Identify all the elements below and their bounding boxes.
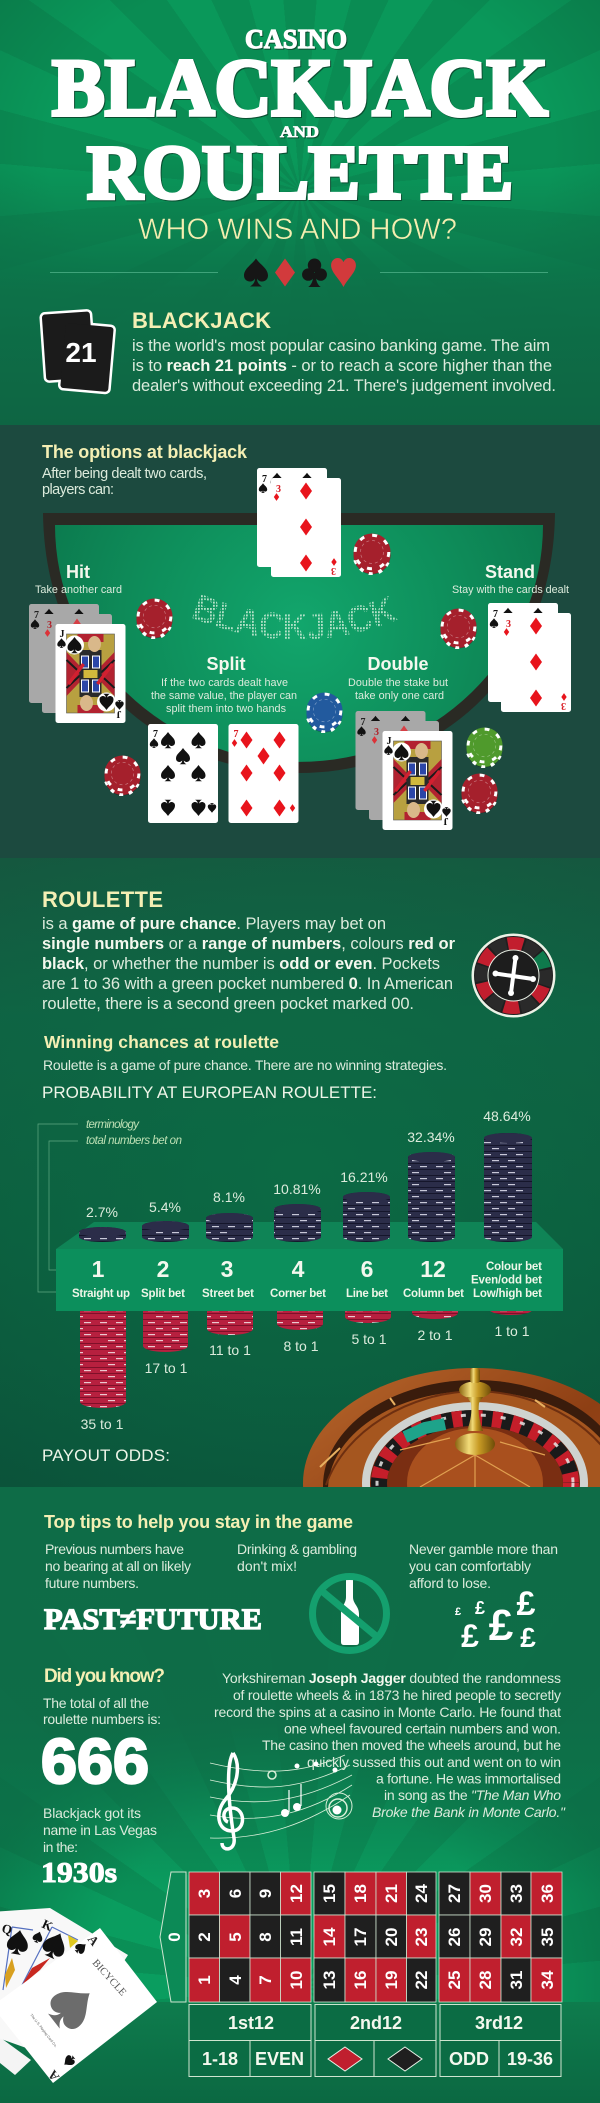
icon: 21 cards: 21 bbox=[65, 337, 97, 368]
legend: terminology and total numbers bbox=[38, 1119, 182, 1292]
double option: Double bbox=[368, 654, 428, 674]
roulette table: number grid: 3 bbox=[195, 1889, 214, 1898]
playing cards fan: A bbox=[85, 1932, 103, 1949]
roulette table: number grid: 35 bbox=[538, 1928, 557, 1946]
probability percentages: 32.34% bbox=[407, 1129, 455, 1145]
roulette table: number grid: 33 bbox=[507, 1884, 526, 1903]
blackjack description bbox=[132, 337, 556, 395]
hit option bbox=[29, 562, 173, 723]
winning chances note: Roulette is a game of pure chance. There are no winning strategies. bbox=[43, 1057, 447, 1073]
icon: pound signs: £ bbox=[489, 1601, 514, 1650]
panel: the options at blackjack bbox=[0, 425, 600, 858]
payout odds labels: 1 to 1 bbox=[494, 1323, 530, 1339]
split option: If the two cards dealt have bbox=[161, 677, 288, 689]
red payout chip stacks bbox=[80, 1300, 532, 1408]
bet labels: Colour bet bbox=[486, 1261, 542, 1273]
blackjack description: is the world's most popular casino banking game. The aim bbox=[132, 337, 550, 355]
bet labels bbox=[72, 1261, 542, 1300]
roulette table: number grid: 7 bbox=[256, 1975, 275, 1985]
fact: 1930s: 1930s bbox=[41, 1857, 117, 1889]
roulette description bbox=[42, 915, 456, 1013]
probability percentages bbox=[86, 1108, 531, 1220]
split option: the same value, the player can bbox=[151, 690, 297, 702]
roulette table: number grid: 29 bbox=[476, 1928, 495, 1946]
tip: budget: afford to lose. bbox=[409, 1575, 491, 1591]
roulette table: number grid: 25 bbox=[445, 1971, 464, 1989]
Joseph Jagger story: of roulette wheels & in 1873 he hired people to secretly bbox=[233, 1687, 561, 1703]
Joseph Jagger story: Yorkshireman Joseph Jagger doubted the randomness bbox=[222, 1670, 561, 1686]
roulette table: number grid: 8 bbox=[256, 1932, 275, 1942]
roulette table: number grid: 16 bbox=[351, 1971, 370, 1989]
icon: 21 cards bbox=[42, 311, 114, 392]
Joseph Jagger story: quickly sussed this out and went on to win bbox=[307, 1754, 561, 1770]
payout odds labels: 11 to 1 bbox=[209, 1342, 251, 1358]
tip: budget bbox=[409, 1541, 558, 1591]
icon: no bottle bbox=[312, 1576, 386, 1650]
roulette table: number grid: 27 bbox=[445, 1884, 464, 1903]
roulette description: are 1 to 36 with a green pocket numbered 0. In American bbox=[42, 975, 453, 993]
roulette table: outside bets bbox=[189, 2004, 561, 2076]
roulette table: number grid: 18 bbox=[351, 1884, 370, 1903]
double option: take only one card bbox=[355, 690, 444, 702]
roulette table: number grid: 11 bbox=[287, 1928, 306, 1946]
playing cards fan bbox=[0, 1908, 157, 2084]
roulette table: number grid: 9 bbox=[256, 1889, 275, 1898]
roulette table: number grid: 13 bbox=[320, 1971, 339, 1989]
playing cards fan: K bbox=[40, 1916, 56, 1934]
tip: past numbers: no bearing at all on likely bbox=[45, 1558, 191, 1574]
roulette heading: ROULETTE bbox=[42, 887, 163, 912]
title: BLACKJACK bbox=[52, 42, 548, 133]
bet labels: Street bet bbox=[202, 1288, 254, 1300]
playing cards fan: The U.S. Playing Card Co. bbox=[29, 2013, 58, 2048]
roulette table: number grid: 14 bbox=[320, 1927, 339, 1946]
dealer cards and chip bbox=[257, 468, 390, 577]
split option bbox=[104, 654, 343, 823]
Joseph Jagger story: Broke the Bank in Monte Carlo." bbox=[372, 1804, 566, 1820]
bet labels: Split bet bbox=[141, 1288, 185, 1300]
roulette table: outside bets: ODD bbox=[449, 2049, 489, 2069]
hit option: Take another card bbox=[35, 584, 122, 596]
tip: drinking: Drinking & gambling bbox=[237, 1541, 357, 1557]
roulette table: number grid: 17 bbox=[351, 1928, 370, 1946]
tip: budget: you can comfortably bbox=[409, 1558, 531, 1574]
subtitle: WHO WINS AND HOW? bbox=[138, 213, 457, 246]
double option: Double the stake but bbox=[348, 677, 448, 689]
panel: header and blackjack intro bbox=[0, 0, 600, 425]
roulette table: number grid: 32 bbox=[507, 1928, 526, 1946]
tip: drinking bbox=[237, 1541, 357, 1574]
payout odds labels: 35 to 1 bbox=[81, 1416, 124, 1432]
title: AND bbox=[280, 124, 319, 141]
double option bbox=[348, 654, 503, 830]
icon: music notes bbox=[210, 1753, 352, 1849]
playing cards fan: BICYCLE bbox=[90, 1958, 128, 1998]
icon: pound signs: £ bbox=[461, 1618, 479, 1654]
tip: past numbers bbox=[44, 1541, 262, 1636]
split option: Split bbox=[206, 654, 246, 674]
roulette description: black, or whether the number is odd or even. Pockets bbox=[42, 955, 440, 973]
options intro: players can: bbox=[42, 482, 114, 498]
roulette table: number grid: 21 bbox=[382, 1884, 401, 1903]
roulette table: outside bets: 1-18 bbox=[202, 2049, 238, 2069]
hit option: Hit bbox=[66, 562, 90, 582]
tips heading: Top tips to help you stay in the game bbox=[44, 1512, 353, 1532]
roulette description: is a game of pure chance. Players may bet on bbox=[42, 915, 386, 933]
options intro bbox=[42, 466, 207, 498]
fact: 666: The total of all the bbox=[43, 1695, 149, 1711]
payout odds labels: 5 to 1 bbox=[351, 1331, 387, 1347]
fact: 1930s: Blackjack got its bbox=[43, 1805, 141, 1821]
split option: split them into two hands bbox=[166, 703, 287, 715]
tip: drinking: don't mix! bbox=[237, 1558, 297, 1574]
roulette table: outside bets: EVEN bbox=[255, 2049, 304, 2069]
roulette table: outside bets: 1st12 bbox=[228, 2013, 274, 2033]
title bbox=[52, 24, 548, 215]
payout odds labels bbox=[81, 1323, 530, 1432]
bet labels: Column bet bbox=[403, 1288, 464, 1300]
bet counts: 12 bbox=[420, 1256, 446, 1282]
roulette table: number grid: 0 bbox=[165, 1932, 184, 1942]
playing cards fan: Q bbox=[0, 1920, 14, 1938]
winning chances heading: Winning chances at roulette bbox=[44, 1032, 279, 1052]
bet counts: 1 bbox=[92, 1256, 105, 1282]
roulette table: number grid: 28 bbox=[476, 1971, 495, 1989]
blackjack description: is to reach 21 points - or to reach a score higher than the bbox=[132, 357, 552, 375]
options intro: After being dealt two cards, bbox=[42, 466, 207, 482]
bet labels: Low/high bet bbox=[473, 1288, 542, 1300]
did you know heading: Did you know? bbox=[44, 1666, 165, 1687]
Joseph Jagger story: The casino then moved the wheels around, but he bbox=[262, 1737, 561, 1753]
tip: past numbers: future numbers. bbox=[45, 1575, 139, 1591]
stand option: Stand bbox=[485, 562, 535, 582]
roulette table: outside bets: 2nd12 bbox=[350, 2013, 402, 2033]
stand option: Stay with the cards dealt bbox=[452, 584, 569, 596]
title: ROULETTE bbox=[87, 131, 513, 215]
fact: 1930s: name in Las Vegas bbox=[43, 1822, 157, 1838]
bet counts: 3 bbox=[221, 1256, 233, 1282]
bet counts: 6 bbox=[361, 1256, 373, 1282]
split option: 7 bbox=[153, 729, 158, 740]
title: CASINO bbox=[245, 24, 347, 54]
payout odds heading: PAYOUT ODDS: bbox=[42, 1446, 170, 1465]
fact: 666: 666 bbox=[41, 1727, 149, 1797]
roulette table: number grid: 10 bbox=[287, 1971, 306, 1989]
roulette table: number grid: 31 bbox=[507, 1971, 526, 1989]
bet labels: Corner bet bbox=[270, 1288, 326, 1300]
legend: terminology and total numbers: terminology bbox=[86, 1119, 140, 1131]
roulette table: number grid: 23 bbox=[412, 1928, 431, 1946]
fact: 1930s bbox=[41, 1805, 157, 1889]
legend: terminology and total numbers: total numbers bet on bbox=[86, 1135, 182, 1147]
green betting bar bbox=[56, 1222, 563, 1311]
roulette description: roulette, there is a second green pocket marked 00. bbox=[42, 995, 414, 1013]
stand option bbox=[440, 562, 571, 712]
icon: pound signs: £ bbox=[520, 1622, 536, 1653]
Joseph Jagger story: a fortune. He was immortalised bbox=[376, 1770, 561, 1786]
bet counts: 2 bbox=[157, 1256, 169, 1282]
roulette table: number grid: 2 bbox=[195, 1932, 214, 1942]
fact: 666: roulette numbers is: bbox=[43, 1711, 161, 1727]
Joseph Jagger story: one wheel favoured certain numbers and won. bbox=[284, 1720, 561, 1736]
roulette table: outside bets: 19-36 bbox=[507, 2049, 553, 2069]
probability percentages: 10.81% bbox=[273, 1181, 321, 1197]
roulette table: number grid: 6 bbox=[226, 1889, 245, 1898]
roulette description: single numbers or a range of numbers, colours red or bbox=[42, 935, 456, 953]
roulette table: number grid: 22 bbox=[412, 1971, 431, 1989]
bet labels: Even/odd bet bbox=[471, 1274, 542, 1286]
icon: pound signs: £ bbox=[475, 1598, 485, 1618]
roulette table: number grid: 4 bbox=[226, 1975, 245, 1985]
card suit icons bbox=[50, 258, 548, 287]
roulette table: number grid: 15 bbox=[320, 1884, 339, 1903]
icon: pound signs: £ bbox=[455, 1606, 461, 1618]
roulette table: number grid: 5 bbox=[226, 1932, 245, 1942]
blackjack description: dealer's without exceeding 21. There's judgement involved. bbox=[132, 377, 556, 395]
roulette table: number grid: 20 bbox=[382, 1928, 401, 1946]
blackjack heading: BLACKJACK bbox=[132, 308, 271, 333]
bet labels: Straight up bbox=[72, 1288, 130, 1300]
bet counts bbox=[92, 1256, 446, 1282]
roulette wheel photo illustration bbox=[303, 1368, 600, 1598]
probability percentages: 5.4% bbox=[149, 1199, 181, 1215]
payout odds labels: 17 to 1 bbox=[145, 1360, 188, 1376]
playing cards fan: A bbox=[44, 2067, 62, 2084]
blackjack table: BLACKJACK bbox=[192, 594, 398, 640]
options heading: The options at blackjack bbox=[42, 442, 248, 462]
roulette table: number grid: 36 bbox=[538, 1884, 557, 1903]
fact: 1930s: in the: bbox=[43, 1839, 78, 1855]
split option: 7 bbox=[234, 729, 238, 740]
roulette table: number grid: 26 bbox=[445, 1928, 464, 1946]
Joseph Jagger story: in song as the "The Man Who bbox=[384, 1787, 561, 1803]
tip: past numbers: Previous numbers have bbox=[45, 1541, 184, 1557]
roulette table: number grid: 30 bbox=[476, 1884, 495, 1903]
payout odds labels: 2 to 1 bbox=[417, 1327, 453, 1343]
probability percentages: 48.64% bbox=[483, 1108, 531, 1124]
bet labels: Line bet bbox=[346, 1288, 388, 1300]
blackjack table bbox=[43, 513, 555, 773]
navy probability chip stacks bbox=[79, 1133, 532, 1242]
tip: budget: Never gamble more than bbox=[409, 1541, 558, 1557]
panel: tips, trivia and betting layout bbox=[0, 1487, 600, 2103]
probability percentages: 8.1% bbox=[213, 1189, 245, 1205]
roulette table: number grid: 19 bbox=[382, 1971, 401, 1989]
tip: past numbers: PAST≠FUTURE bbox=[44, 1603, 262, 1636]
Joseph Jagger story: record the spins at a casino in Monte Carlo. He found that bbox=[214, 1704, 561, 1720]
icon: pound signs bbox=[455, 1585, 536, 1654]
roulette table: number grid bbox=[160, 1872, 562, 2002]
Joseph Jagger story bbox=[214, 1670, 566, 1820]
roulette table: number grid: 1 bbox=[195, 1975, 214, 1985]
icon: pound signs: £ bbox=[517, 1585, 536, 1623]
icon: roulette wheel bbox=[468, 930, 559, 1021]
roulette table: number grid: 12 bbox=[287, 1884, 306, 1903]
roulette table: outside bets: 3rd12 bbox=[475, 2013, 523, 2033]
payout odds labels: 8 to 1 bbox=[283, 1338, 319, 1354]
panel: roulette bbox=[0, 858, 600, 1487]
probability heading: PROBABILITY AT EUROPEAN ROULETTE: bbox=[42, 1083, 377, 1102]
probability percentages: 2.7% bbox=[86, 1204, 118, 1220]
probability percentages: 16.21% bbox=[340, 1169, 388, 1185]
fact: 666 bbox=[41, 1695, 161, 1797]
bet counts: 4 bbox=[292, 1256, 305, 1282]
roulette table: number grid: 24 bbox=[412, 1884, 431, 1903]
roulette table: number grid: 34 bbox=[538, 1970, 557, 1989]
